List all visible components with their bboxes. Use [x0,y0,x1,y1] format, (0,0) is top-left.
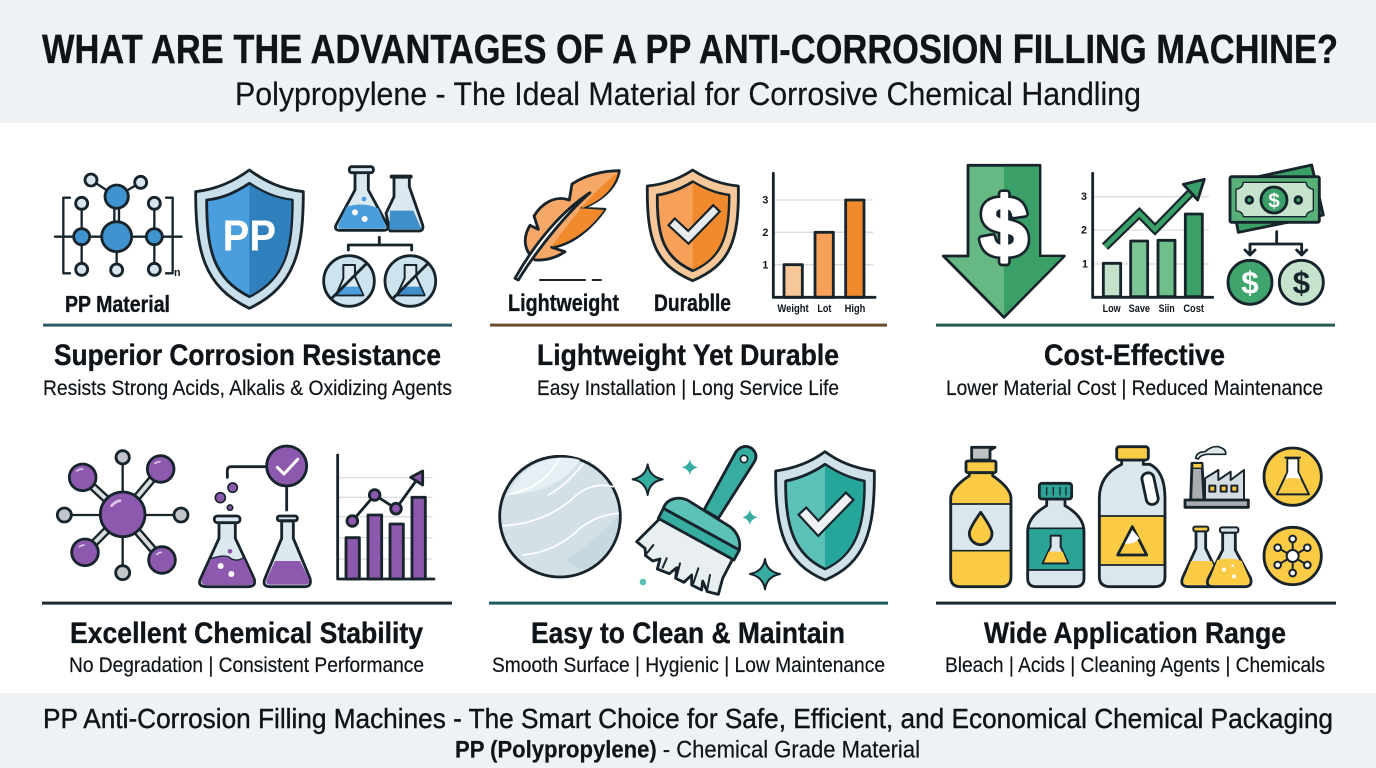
icon: down arrow with dollar: $ [981,181,1027,274]
icon: yellow flasks [1182,527,1251,587]
heading: superior corrosion resistance: Superior Corrosion Resistance [54,339,441,372]
caption: Easy Installation | Long Service Life [537,377,839,400]
heading: cost-effective: Cost-Effective [1044,339,1225,372]
icon: orange shield [647,170,738,281]
heading: easy to clean and maintain: Easy to Clean & Maintain [531,617,845,650]
caption: Lower Material Cost | Reduced Maintenance [946,377,1323,400]
label: Durablle: Durablle [654,290,731,317]
icon: purple flasks with check [200,446,310,587]
icon: PP molecule: n [174,267,181,279]
icon: chemical bottle [1028,483,1084,587]
icon: purple molecule [57,451,188,580]
footer subline: PP (Polypropylene) - Chemical Grade Material [455,736,920,764]
chart: rising savings: Cost [1183,303,1204,315]
caption: Bleach | Acids | Cleaning Agents | Chemicals [945,654,1325,677]
panel: cost-effective [936,165,1335,400]
icon: feather [515,171,619,280]
chart: rising savings: Low [1103,303,1121,315]
icon: banknotes splitting into coins [1228,165,1323,304]
panel: superior corrosion resistance [43,167,452,400]
chart: rising savings: 2 [1081,224,1087,236]
icon: banknotes splitting into coins: $ [1268,189,1280,212]
panel: excellent chemical stability [42,446,452,677]
bar chart: weight lot high: 3 [762,194,768,206]
bar chart: weight lot high: High [845,303,865,315]
chart: rising savings: Siin [1159,303,1175,315]
caption: Resists Strong Acids, Alkalis & Oxidizing Agents [43,377,452,400]
heading: wide application range: Wide Application Range [984,617,1286,650]
icon: down arrow with dollar: $ [981,181,1027,274]
bar chart: weight lot high: 2 [762,227,768,239]
chart: purple bars with trend [338,455,434,579]
subtitle: Polypropylene - The Ideal Material for Corrosive Chemical Handling [235,76,1141,112]
bar chart: weight lot high: Weight [777,303,809,315]
chart: rising savings: 1 [1082,259,1088,271]
panel: easy to clean and maintain [489,446,888,677]
panel: lightweight yet durable [490,170,887,400]
icon: cleaning brush and sparkles [633,446,780,594]
heading: excellent chemical stability: Excellent Chemical Stability [70,617,423,650]
icon: flask badge [1264,448,1321,505]
icon: molecule badge [1264,527,1321,585]
label: Lightweight: Lightweight [508,290,619,317]
icon: banknotes splitting into coins: $ [1293,265,1310,300]
footer band [0,693,1376,768]
icon: pump bottle [951,447,1011,587]
icon: down arrow with dollar [943,165,1064,317]
icon: smooth sphere [500,456,620,577]
icon: PP shield: PP [223,212,276,261]
chart: rising savings: 3 [1081,191,1087,203]
caption: No Degradation | Consistent Performance [69,654,424,677]
bar chart: weight lot high: 1 [762,259,768,271]
icon: PP shield [196,170,303,308]
icon: factory [1185,447,1248,507]
icon: jug with hazard label [1099,447,1165,587]
icon: flasks and no-flask symbols [324,167,436,306]
bar chart: weight lot high: Lot [817,303,832,315]
caption: Smooth Surface | Hygienic | Low Maintenance [492,654,885,677]
icon: PP molecule [55,174,182,279]
label: PP Material: PP Material [65,291,170,317]
icon: banknotes splitting into coins: $ [1241,265,1259,300]
panel: wide application range [936,447,1336,677]
chart: rising savings: Save [1129,303,1150,315]
icon: teal shield [776,452,874,580]
chart: rising savings [1081,173,1213,315]
header band [0,0,1376,123]
heading: lightweight yet durable: Lightweight Yet Durable [537,339,839,372]
bar chart: weight lot high [762,173,875,315]
